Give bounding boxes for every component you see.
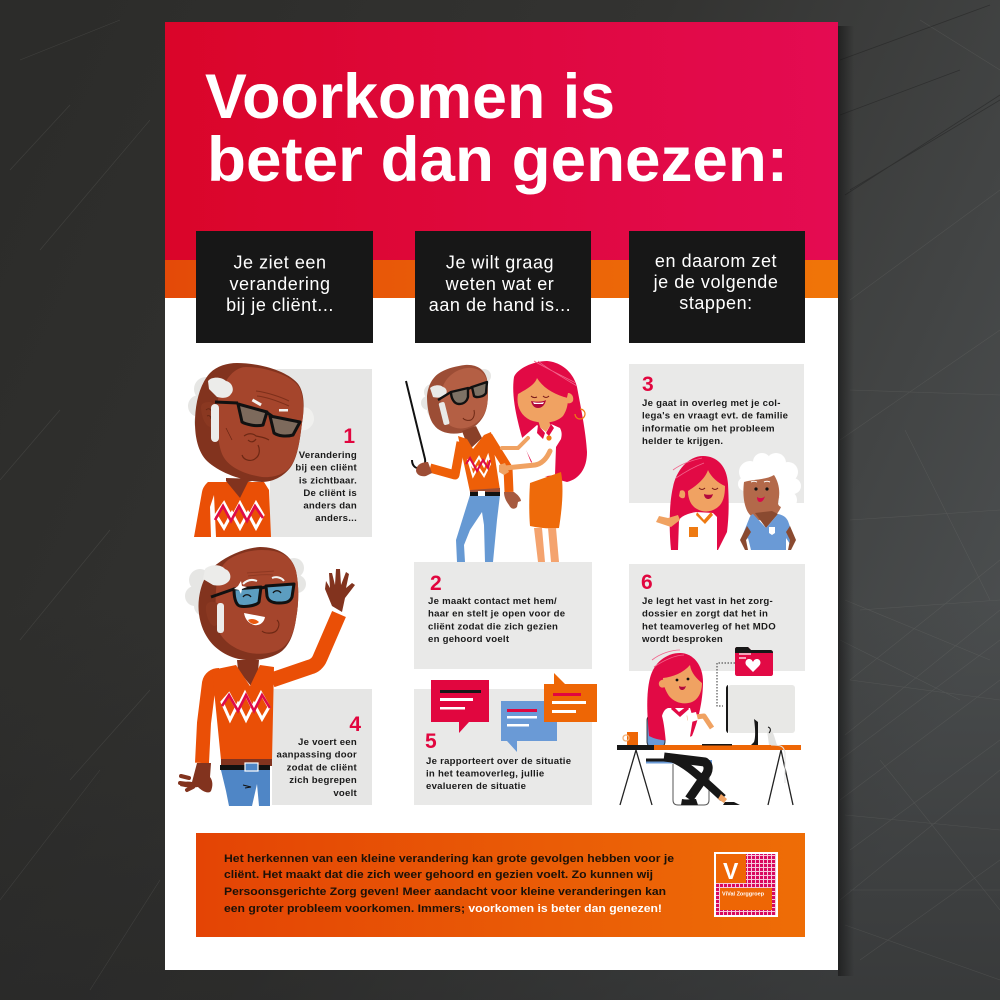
- illustration: caregiver at desk: [623, 650, 740, 805]
- text step 5: [426, 756, 571, 792]
- text step 3: [642, 398, 788, 447]
- column heading 3: je de volgende: [653, 272, 778, 292]
- panel 2: [414, 562, 592, 669]
- colleague with red hair: [656, 456, 729, 550]
- logo: Vivai Zorggroep: ViVal Zorggroep: [722, 892, 765, 898]
- text step 2: en gehoord voelt: [428, 634, 510, 645]
- text step 4: zich begrepen: [289, 775, 357, 786]
- text step 1: bij een cliënt: [295, 462, 358, 474]
- text step 6: het teamoverleg of het MDO: [642, 622, 776, 632]
- footer panel: [196, 833, 805, 937]
- logo: Vivai Zorggroep: [714, 852, 778, 917]
- header band: red: [165, 22, 838, 260]
- title: [205, 62, 788, 195]
- text step 2: [428, 596, 565, 645]
- panel 5: [414, 673, 597, 805]
- text step 3: informatie om het probleem: [642, 424, 775, 434]
- logo: Vivai Zorggroep: V: [723, 858, 739, 884]
- text step 1: anders...: [315, 513, 357, 524]
- number 6: 6: [641, 571, 653, 594]
- shirt and arm: [662, 708, 693, 743]
- number 2: 2: [430, 572, 442, 595]
- icon: blue speech bubble: [501, 701, 557, 752]
- footer message: cliënt. Het maakt dat die zich weer gehoord en gezien voelt. Zo kunnen wij: [224, 869, 653, 881]
- text step 4: voelt: [333, 788, 358, 799]
- step 3 background: [629, 364, 804, 503]
- number 3: 3: [642, 373, 654, 396]
- panel 3: [629, 364, 804, 550]
- text step 6: [641, 596, 776, 645]
- cane: [406, 381, 425, 468]
- column heading 3: en daarom zet: [655, 251, 777, 271]
- glasses: [211, 584, 294, 606]
- text step 3: Je gaat in overleg met je col-: [642, 398, 781, 409]
- title: beter dan genezen:: [207, 125, 788, 195]
- text step 4: zodat de cliënt: [287, 762, 358, 774]
- mug: [623, 732, 638, 745]
- footer message: Persoonsgerichte Zorg geven! Meer aandacht voor kleine veranderingen kan: [224, 886, 666, 898]
- caregiver: [499, 361, 587, 562]
- text step 1: Verandering: [299, 450, 357, 461]
- icon: orange speech bubble: [544, 673, 597, 722]
- orange band: [165, 260, 838, 298]
- text step 2: Je maakt contact met hem/: [428, 596, 557, 607]
- illustration: caregiver supporting client: [406, 361, 587, 562]
- text step 6: dossier en zorgt dat het in: [642, 608, 768, 620]
- text step 2: cliënt zodat die zich gezien: [428, 622, 558, 632]
- illustration: client with dark glasses: [188, 363, 314, 537]
- footer message: [224, 853, 674, 915]
- illustration: two colleagues: [656, 453, 801, 550]
- column heading 2: weten wat er: [445, 274, 554, 294]
- title: Voorkomen is: [205, 62, 615, 132]
- text step 3: lega's en vraagt evt. de familie: [642, 410, 788, 422]
- number 4: 4: [349, 713, 361, 736]
- text step 1: [295, 450, 358, 524]
- arms and torso: [272, 614, 339, 680]
- chair: [646, 715, 712, 805]
- arms and torso: [430, 442, 461, 475]
- column heading 2: aan de hand is...: [429, 295, 571, 315]
- panel 1: change is visible: [188, 363, 372, 537]
- text step 1: anders dan: [303, 500, 357, 512]
- text step 5: Je rapporteert over de situatie: [426, 756, 571, 767]
- footer message: een groter probleem voorkomen. Immers; voorkomen is beter dan genezen!: [224, 903, 662, 915]
- text step 1: is zichtbaar.: [299, 476, 357, 486]
- step 6 background: [629, 564, 805, 671]
- column heading 1: Je ziet een: [233, 252, 327, 272]
- column heading 1: [196, 231, 373, 343]
- dotted connector: [717, 663, 735, 706]
- step 5 background: [414, 689, 592, 805]
- text step 6: wordt besproken: [641, 634, 723, 645]
- desk: [617, 744, 801, 805]
- column heading 1: bij je cliënt...: [226, 295, 334, 315]
- glasses: [438, 382, 487, 404]
- client: [416, 365, 521, 562]
- column heading 2: Je wilt graag: [446, 252, 554, 272]
- panel 4: adjustment made: [180, 547, 372, 806]
- text step 5: evalueren de situatie: [426, 781, 526, 792]
- step 4 background: [272, 689, 372, 805]
- text step 1: De cliënt is: [303, 488, 357, 499]
- icon: dossier folder with heart: [735, 647, 773, 676]
- icon: computer monitor: [726, 685, 795, 746]
- step 1 background: [270, 369, 372, 537]
- text step 3: helder te krijgen.: [642, 436, 723, 447]
- icon: red speech bubble: [431, 680, 489, 733]
- text step 2: haar en stelt je open voor de: [428, 608, 565, 620]
- column heading 3: [629, 231, 805, 343]
- number 5: 5: [425, 730, 437, 753]
- text step 4: aanpassing door: [276, 750, 357, 760]
- text step 4: Je voert een: [298, 737, 357, 748]
- poster sheet: [165, 22, 838, 970]
- column heading 2: [415, 231, 591, 343]
- colleague with white hair: [738, 453, 801, 550]
- text step 6: Je legt het vast in het zorg-: [642, 596, 773, 607]
- step 2 background: [414, 562, 592, 669]
- text step 4: [276, 737, 358, 799]
- footer message: Het herkennen van een kleine verandering kan grote gevolgen hebben voor je: [224, 853, 674, 865]
- column heading 1: verandering: [229, 274, 331, 294]
- panel 6: [617, 564, 805, 805]
- text step 5: in het teamoverleg, jullie: [426, 768, 544, 780]
- legs: [664, 757, 708, 799]
- glasses: [215, 402, 300, 436]
- illustration: waving client: [180, 547, 355, 806]
- hair: [647, 653, 703, 740]
- poster shadow: [838, 26, 854, 976]
- number 1: 1: [343, 425, 355, 448]
- column heading 3: stappen:: [679, 293, 753, 313]
